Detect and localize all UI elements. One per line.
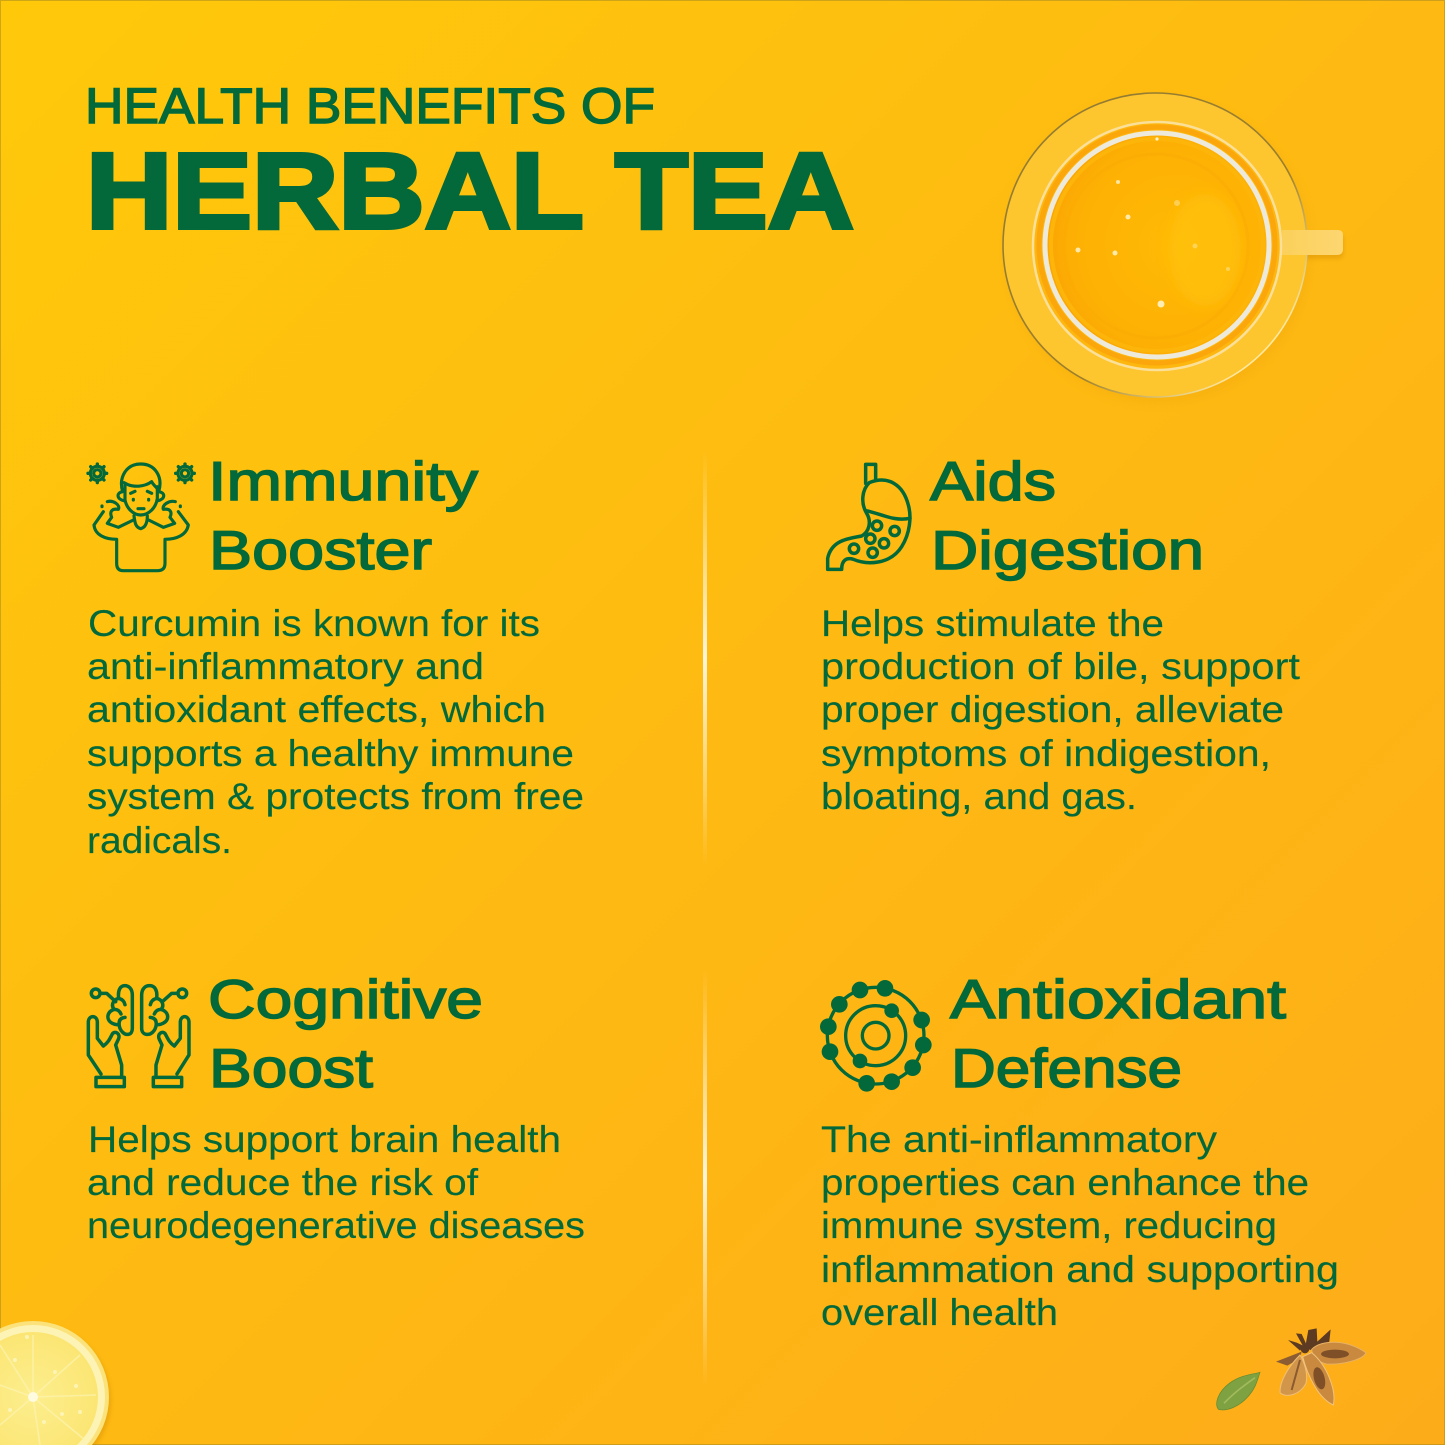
image: star anise: [1276, 1328, 1366, 1405]
title: [85, 78, 854, 251]
heading: [950, 968, 1286, 1099]
icon: antioxidant molecule: [820, 980, 932, 1092]
heading: Aids: [930, 450, 1056, 512]
heading: Booster: [209, 519, 432, 581]
text block: production of bile, support: [821, 646, 1301, 687]
icon: stomach: [828, 464, 910, 569]
heading: Boost: [209, 1037, 373, 1099]
text block: Helps stimulate the: [821, 603, 1164, 644]
panel: immunity booster: [87, 450, 584, 861]
heading: [208, 450, 479, 581]
heading: Cognitive: [208, 968, 483, 1030]
title line: health benefits of: HEALTH BENEFITS OF: [85, 78, 655, 134]
heading: Digestion: [931, 519, 1204, 581]
text block: supports a healthy immune: [87, 733, 574, 774]
image: cup of herbal tea on glass saucer: [1003, 93, 1344, 402]
icon: hands holding brain: [88, 986, 189, 1087]
image: lemon slice: [0, 1321, 111, 1445]
heading: Immunity: [208, 450, 479, 512]
image: cardamom pod: [1217, 1372, 1260, 1410]
heading: [208, 968, 483, 1099]
text block: immune system, reducing: [821, 1205, 1277, 1246]
text block: anti-inflammatory and: [87, 646, 484, 687]
heading: [930, 450, 1204, 581]
text block: antioxidant effects, which: [87, 689, 546, 730]
text block: Helps support brain health: [88, 1119, 561, 1160]
heading: Antioxidant: [950, 968, 1286, 1030]
text block: [87, 1119, 585, 1246]
text block: Curcumin is known for its: [88, 603, 540, 644]
text block: system & protects from free: [87, 776, 584, 817]
text block: symptoms of indigestion,: [821, 733, 1271, 774]
text block: neurodegenerative diseases: [87, 1205, 585, 1246]
icon: flexing man with germs: [88, 464, 194, 571]
text block: properties can enhance the: [821, 1162, 1309, 1203]
panel: aids digestion: [821, 450, 1301, 817]
text block: The anti-inflammatory: [821, 1119, 1218, 1160]
text block: proper digestion, alleviate: [821, 689, 1284, 730]
panel: cognitive boost: [87, 968, 585, 1246]
divider top: [703, 450, 707, 866]
text block: [821, 1119, 1339, 1333]
text block: and reduce the risk of: [87, 1162, 479, 1203]
text block: radicals.: [87, 820, 232, 861]
text block: bloating, and gas.: [821, 776, 1137, 817]
title line: herbal tea: HERBAL TEA: [86, 130, 854, 251]
text block: [821, 603, 1301, 817]
panel: antioxidant defense: [820, 968, 1339, 1333]
text block: overall health: [821, 1292, 1058, 1333]
divider bottom: [703, 968, 707, 1386]
text block: [87, 603, 584, 861]
heading: Defense: [951, 1037, 1182, 1099]
text block: inflammation and supporting: [821, 1249, 1339, 1290]
